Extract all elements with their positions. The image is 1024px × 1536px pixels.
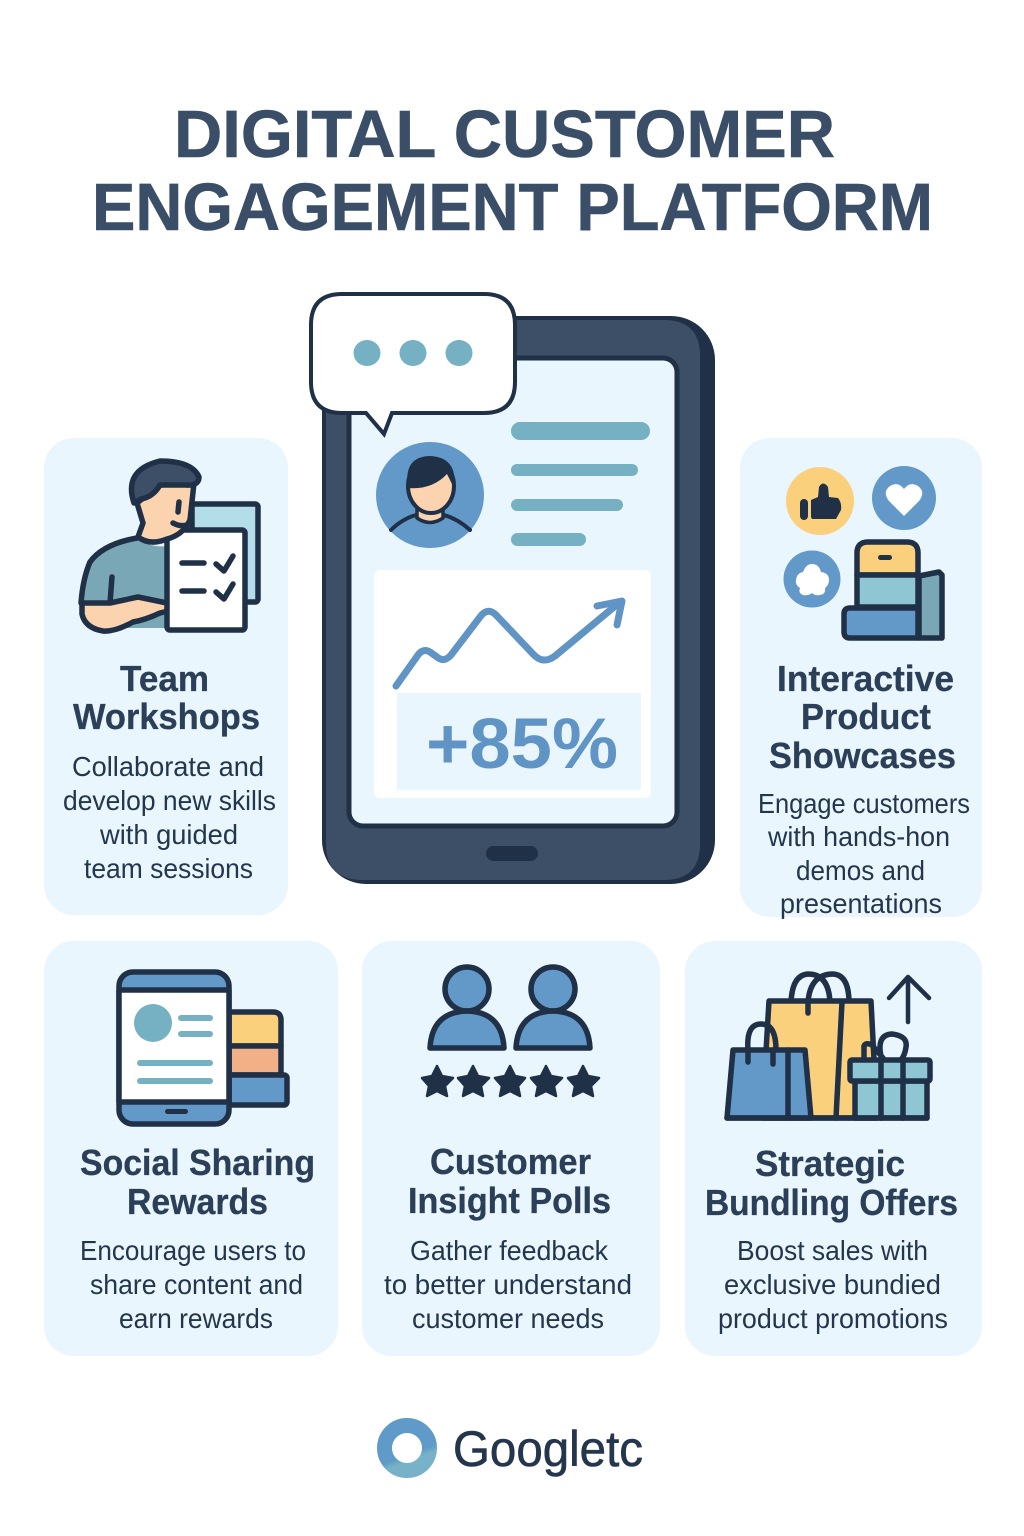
- text lines: [511, 422, 650, 546]
- stat box: +85%: [426, 705, 618, 784]
- title: [92, 97, 933, 245]
- logo ring: [384, 1426, 430, 1470]
- description: strategic bundling offers: [718, 1235, 948, 1334]
- logo: [384, 1421, 643, 1477]
- description: strategic bundling offers: exclusive bundied: [724, 1269, 941, 1300]
- description: interactive product showcases: with hands-hon: [767, 821, 950, 852]
- panel: customer insight polls: [362, 941, 660, 1356]
- description: team workshops: [63, 751, 276, 884]
- heading: interactive product showcases: Product: [801, 696, 931, 737]
- description: interactive product showcases: [758, 788, 970, 919]
- description: social sharing rewards: earn rewards: [119, 1303, 273, 1334]
- heading: team workshops: [73, 658, 260, 737]
- description: interactive product showcases: Engage customers: [758, 788, 970, 819]
- central tablet illustration: [311, 294, 715, 884]
- title: ENGAGEMENT PLATFORM: [92, 170, 933, 245]
- heading: interactive product showcases: [769, 658, 956, 776]
- growth line chart with arrow: [396, 601, 622, 686]
- title: DIGITAL CUSTOMER: [174, 97, 835, 172]
- description: team workshops: team sessions: [84, 853, 253, 884]
- heading: strategic bundling offers: [705, 1143, 958, 1223]
- description: social sharing rewards: [80, 1235, 306, 1334]
- home button: [486, 846, 538, 861]
- heading: customer insight polls: Insight Polls: [408, 1180, 611, 1221]
- description: team workshops: with guided: [99, 819, 238, 850]
- description: customer insight polls: to better understand: [384, 1269, 632, 1300]
- speech bubble: [311, 294, 515, 434]
- description: team workshops: Collaborate and: [72, 751, 264, 782]
- description: social sharing rewards: share content and: [90, 1269, 303, 1300]
- tablet body: [322, 316, 715, 884]
- panel: interactive product showcases: [740, 438, 982, 919]
- description: customer insight polls: Gather feedback: [410, 1235, 608, 1266]
- heading: social sharing rewards: Rewards: [127, 1181, 268, 1222]
- panel: social sharing rewards: [44, 941, 338, 1356]
- icon: phone with stacked cards: [119, 972, 287, 1124]
- icon: person with checklist: [81, 461, 258, 631]
- logo wordmark: Googletc: [453, 1421, 643, 1477]
- heading: social sharing rewards: Social Sharing: [80, 1142, 315, 1183]
- description: social sharing rewards: Encourage users to: [80, 1235, 306, 1266]
- heading: strategic bundling offers: Bundling Offers: [705, 1182, 958, 1223]
- chart card: [374, 570, 651, 798]
- description: strategic bundling offers: product promotions: [718, 1303, 948, 1334]
- heading: strategic bundling offers: Strategic: [755, 1143, 905, 1184]
- description: interactive product showcases: presentations: [780, 888, 942, 919]
- heading: social sharing rewards: [80, 1142, 315, 1222]
- heading: team workshops: Workshops: [73, 696, 260, 737]
- heading: interactive product showcases: Interactive: [777, 658, 954, 699]
- description: customer insight polls: [384, 1235, 632, 1334]
- heading: team workshops: Team: [120, 658, 209, 699]
- heading: customer insight polls: Customer: [430, 1141, 591, 1182]
- avatar: [376, 442, 484, 548]
- heading: customer insight polls: [408, 1141, 611, 1221]
- description: team workshops: develop new skills: [63, 785, 276, 816]
- tablet screen: [349, 358, 677, 826]
- panel: strategic bundling offers: [685, 941, 982, 1356]
- icon: shopping bags, gift and up arrow: [727, 974, 930, 1118]
- icon: reactions and product stack: [784, 466, 942, 638]
- panel: team workshops: [44, 438, 288, 915]
- description: interactive product showcases: demos and: [796, 855, 925, 886]
- description: strategic bundling offers: Boost sales with: [737, 1235, 928, 1266]
- heading: interactive product showcases: Showcases: [769, 735, 956, 776]
- stat box: [397, 693, 641, 790]
- icon: two users with five stars: [422, 967, 599, 1096]
- description: customer insight polls: customer needs: [412, 1303, 604, 1334]
